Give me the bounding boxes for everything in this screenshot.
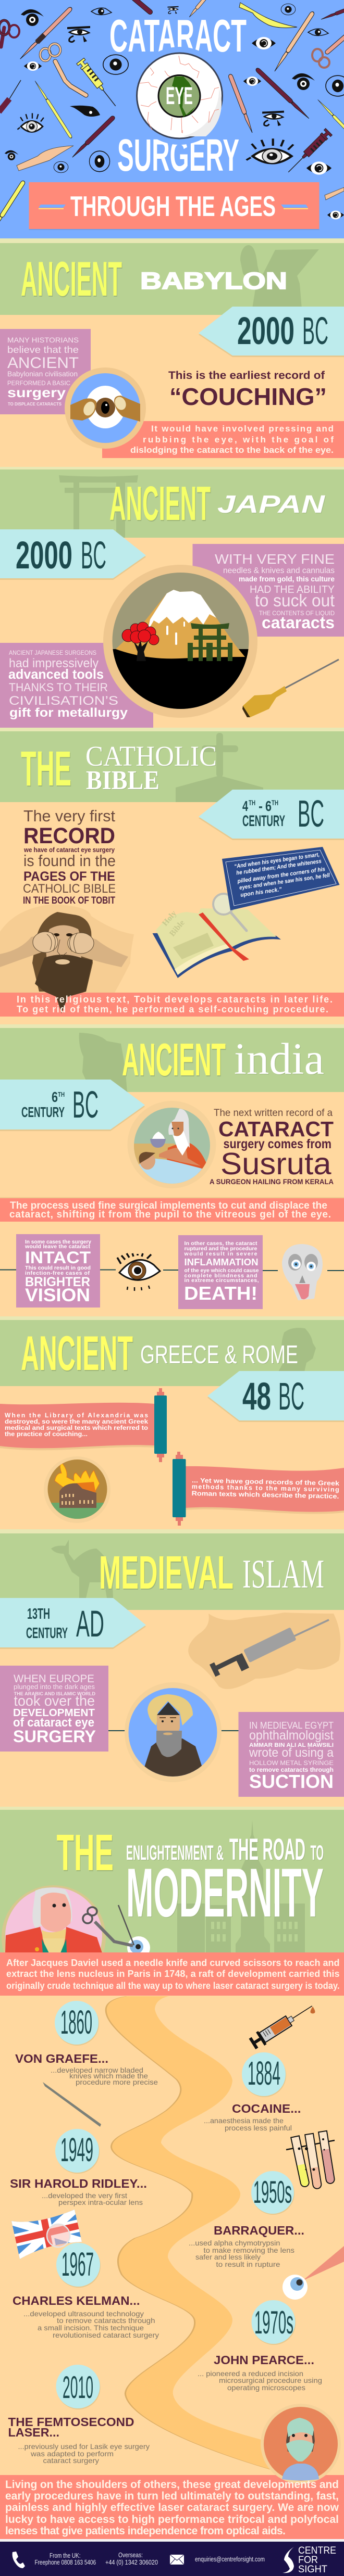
heading: bible: BIBLE	[86, 766, 159, 795]
text: charles kelman: to remove cataracts through	[57, 2316, 155, 2325]
text box: death: complete blindness and	[185, 1273, 257, 1279]
text box: intact	[16, 1234, 100, 1308]
text box: intact: would leave the cataract	[24, 1243, 91, 1250]
text: charles kelman: revolutionised cataract surgery	[53, 2331, 159, 2339]
date arrow: 13th century AD: CENTURY	[26, 1625, 68, 1642]
text: harold ridley: perspex intra-ocular lens	[58, 2198, 143, 2206]
icon: large eyeball	[130, 47, 228, 145]
panel: ancient japan	[0, 467, 344, 728]
callout: bible quote: upon his neck.”	[240, 886, 282, 898]
date arrow: 6th century BC: CENTURY	[21, 1104, 65, 1120]
text: cocaine: process less painful	[225, 2124, 292, 2132]
text box: europe dark ages: THE ARABIC AND ISLAMIC WORLD	[14, 1691, 96, 1696]
text box: europe dark ages: WHEN EUROPE	[14, 1673, 94, 1685]
text box: japanese surgeons: had impressively	[9, 656, 99, 670]
text: susruta	[210, 1108, 334, 1186]
icon: skull	[282, 1244, 323, 1300]
connector lines	[108, 1730, 239, 1731]
text: susruta: CATARACT	[218, 1117, 334, 1141]
panel: timeline	[5, 1996, 344, 2471]
text box: japanese surgeons: CIVILISATION’S	[9, 694, 118, 708]
text: barraquer	[189, 2224, 304, 2268]
text: email: enquiries@centreforsight.com	[195, 2555, 265, 2563]
date arrow: 48 BC: BC	[278, 1375, 304, 1418]
text: harold ridley: SIR HAROLD RIDLEY...	[10, 2177, 147, 2190]
text band: daviel: After Jacques Daviel used a needle knife and curved scissors to reach and	[6, 1958, 340, 1968]
text: susruta: The next written record of a	[214, 1108, 333, 1119]
icon: brown eye	[117, 1253, 160, 1291]
year bubble: 1967	[56, 2243, 101, 2288]
panel: medieval islam	[0, 1529, 344, 1797]
text box: medieval egypt	[239, 1712, 344, 1797]
year bubble: 2010	[56, 2365, 100, 2409]
heading: medieval: MEDIEVAL	[99, 1547, 234, 1599]
text box: historians: PERFORMED A BASIC	[7, 379, 70, 387]
text: charles kelman	[13, 2294, 159, 2339]
text: von graefe: knives which made the	[69, 2072, 148, 2080]
text band: conclusion	[0, 2475, 344, 2542]
ghost: church	[176, 733, 263, 802]
text: barraquer: ...used alpha chymotrypsin	[189, 2239, 280, 2247]
text: very first record: IN THE BOOK OF TOBIT	[23, 895, 115, 906]
text: susruta: Susruta	[220, 1147, 331, 1181]
callout: bible quote: eyes: and when he saw his son, he fell	[239, 872, 330, 891]
heading: the: THE	[56, 1824, 114, 1881]
text: conclusion: painless and highly effective laser cataract surgery. We are now	[5, 2502, 339, 2514]
text box: very fine needles: made from gold, this culture	[239, 575, 335, 583]
text: barraquer: BARRAQUER...	[214, 2224, 304, 2237]
date arrow: 2000 BC	[199, 307, 344, 357]
illustration: susruta portrait	[127, 1101, 216, 1188]
heading: india: india	[234, 1034, 324, 1084]
year bubble: 1949: 1949	[60, 2131, 93, 2168]
text: barraquer: to make removing the lens	[203, 2246, 294, 2254]
callout: bible quote: “And when his eyes began to smart,	[234, 852, 320, 870]
text box: historians	[0, 329, 91, 414]
panel: ancient india	[0, 1024, 344, 1309]
date arrow: 4th to 6th century BC: TH	[272, 798, 278, 807]
text: charles kelman: a small incision. This technique	[38, 2324, 144, 2332]
date arrow: 4th to 6th century BC: 6	[265, 798, 272, 814]
text: john pearce: operating microscopes	[227, 2383, 305, 2392]
ghost: ganesha	[79, 1033, 127, 1092]
text: very first record	[23, 807, 116, 906]
text: von graefe	[15, 2052, 158, 2086]
text: uk phone: Freephone 0808 163 5406	[34, 2558, 96, 2566]
icon: eye with laser	[282, 2246, 344, 2300]
text box: europe dark ages	[0, 1666, 108, 1752]
text box: intact: infection-free cases of	[25, 1270, 90, 1276]
year bubble: 1860: 1860	[60, 2003, 92, 2041]
text box: intact: In some cases the surgery	[25, 1239, 91, 1245]
panel: ancient babylon: ANCIENT	[21, 251, 122, 306]
scroll: library of alexandria: medical and surgical texts which referred to	[5, 1424, 148, 1431]
heading: the: THE	[21, 741, 71, 796]
panel: timeline: 1950s	[253, 2175, 292, 2210]
scroll: roman texts: methods thanks to the many surviving	[192, 1483, 339, 1493]
icons: scattered eyes	[5, 4, 344, 219]
panel: modernity: TO	[311, 1842, 324, 1864]
text box: very fine needles: WITH VERY FINE	[215, 551, 335, 567]
text band: daviel: extract the lens nucleus in Paris in 1748, a raft of development carried this	[6, 1969, 340, 1979]
ghost: winged horse	[240, 245, 319, 315]
year bubble: 1860	[55, 2001, 99, 2046]
date arrow: 2000 BC: BC	[81, 534, 106, 577]
ghost: roman head	[278, 1328, 316, 1372]
illustration: holy bible: Bible	[168, 918, 187, 938]
logo: centre for sight: CENTRE	[298, 2545, 336, 2556]
text: john pearce: JOHN PEARCE...	[214, 2353, 314, 2367]
date arrow: 13th century AD: AD	[76, 1604, 104, 1645]
text: couching explanation: dislodging the cataract to the back of the eye.	[130, 445, 334, 455]
date arrow: 48 BC	[207, 1371, 344, 1422]
text box: death: DEATH!	[184, 1283, 257, 1304]
text: tobit develops cataracts: In this religious text, Tobit develops cataracts in later life.	[17, 994, 333, 1005]
text box: very fine needles	[193, 544, 344, 637]
text box: medieval egypt: SUCTION	[249, 1771, 334, 1792]
ghost: torii gate	[59, 475, 138, 538]
scroll: library of alexandria: destroyed, so were the many ancient Greek	[5, 1418, 148, 1425]
text: femtosecond laser: ...previously used for Lasik eye surgery	[18, 2442, 150, 2451]
date arrow: 2000 BC: 2000	[16, 534, 72, 577]
text: very first record: we have of cataract eye surgery	[23, 846, 115, 854]
panel: header	[0, 0, 344, 238]
year bubble: 1884: 1884	[248, 2054, 280, 2092]
text: barraquer: to result in rupture	[216, 2260, 280, 2268]
text: barraquer: safer and less likely	[195, 2253, 261, 2261]
text: cocaine: COCAINE...	[232, 2102, 301, 2115]
date arrow: 2000 BC	[0, 529, 146, 580]
text box: medieval egypt: AMMAR BIN ALI AL MAWSILI	[249, 1742, 334, 1748]
heading: ancient: ANCIENT	[122, 1034, 226, 1085]
body text box: pressing	[102, 421, 344, 458]
text box: death: ruptured and the procedure	[185, 1246, 257, 1252]
text: couching explanation: rubbing the eye, with the goal of	[143, 435, 334, 445]
text: femtosecond laser: was adapted to perform	[30, 2450, 114, 2458]
text: von graefe: procedure more precise	[76, 2078, 158, 2086]
icons: scissors and knives	[0, 3, 344, 200]
text box: japanese surgeons: advanced tools	[8, 666, 104, 682]
text: harold ridley	[10, 2177, 147, 2206]
text box: death: in extreme circumstances,	[185, 1277, 259, 1284]
text box: intact: This could result in good	[25, 1265, 91, 1271]
text: overseas phone	[105, 2551, 158, 2566]
text box: death: of the eye which could cause	[185, 1267, 259, 1274]
text box: historians: believe that the	[7, 345, 79, 355]
icons: syringes	[77, 58, 332, 175]
icon: orange syringe	[248, 1999, 316, 2051]
text band: process: The process used fine surgical implements to cut and displace the	[10, 1200, 327, 1211]
text box: intact: INTACT	[25, 1248, 91, 1267]
year bubble: 1950s	[251, 2171, 294, 2215]
callout: bible quote: pilled away from the corners of his	[237, 866, 326, 885]
illustration: metal syringe	[188, 1613, 340, 1689]
scroll: roman texts: Roman texts which describe the practice.	[191, 1490, 339, 1500]
text box: europe dark ages: of cataract eye	[13, 1716, 94, 1730]
text: john pearce: microsurgical procedure using	[219, 2376, 322, 2384]
footer	[0, 2542, 344, 2576]
text: charles kelman: CHARLES KELMAN...	[13, 2294, 140, 2307]
text: conclusion: Living on the shoulders of others, these great developments and	[5, 2479, 339, 2491]
heading: catholic: CATHOLIC	[85, 740, 217, 772]
timeline ribbon	[105, 1996, 276, 2471]
text band: process: cataract, shifting it from the pupil to the vitreous gel of the eye.	[9, 1209, 331, 1220]
text box: europe dark ages: SURGERY	[13, 1727, 96, 1746]
text: cocaine: ...anaesthesia made the	[204, 2116, 284, 2125]
text box: very fine needles: needles & knives and cannulas	[223, 566, 335, 575]
text: charles kelman: ...developed ultrasound technology	[23, 2309, 144, 2318]
date arrow: 4th to 6th century BC: 4	[242, 798, 248, 814]
scroll: roman texts	[173, 1452, 344, 1526]
title: surgery: SURGERY	[117, 130, 239, 181]
text: susruta: A SURGEON HAILING FROM KERALA	[210, 1178, 334, 1186]
text box: very fine needles: THE CONTENTS OF LIQUID	[259, 610, 335, 617]
text box: historians: ANCIENT	[7, 354, 79, 372]
text: femtosecond laser: LASER...	[8, 2426, 59, 2439]
text: harold ridley: ...developed the very first	[42, 2191, 127, 2200]
panel: ancient japan: ANCIENT	[109, 476, 211, 530]
text box: medieval egypt: wrote of using a	[249, 1746, 334, 1760]
text: very first record: is found in the	[23, 852, 116, 870]
year bubble: 1967: 1967	[62, 2245, 94, 2283]
panel: greece and rome	[0, 1316, 344, 1526]
text box: very fine needles: HAD THE ABILITY	[250, 584, 335, 595]
text box: japanese surgeons	[0, 643, 153, 728]
icon: narrow knife	[43, 2082, 101, 2127]
text band: process	[0, 1197, 344, 1222]
year bubble: 1884	[242, 2052, 286, 2097]
date arrow: 4th to 6th century BC: -	[259, 798, 263, 814]
icons: scalpels	[0, 0, 344, 235]
illustration: mount fuji	[103, 565, 257, 718]
heading: japan: JAPAN	[217, 491, 326, 518]
text: femtosecond laser: THE FEMTOSECOND	[8, 2415, 134, 2429]
banner: through the ages	[29, 182, 319, 230]
text: conclusion: lucky to have access to high performance trifocal and polyfocal	[5, 2514, 339, 2526]
year bubble: 1970s	[251, 2300, 296, 2345]
icon: drop	[311, 2007, 315, 2013]
illustration: holy bible: Holy	[161, 909, 178, 928]
date arrow: 2000 BC: 2000	[237, 309, 294, 352]
text box: medieval egypt: HOLLOW METAL SYRINGE	[249, 1759, 334, 1767]
text: uk phone: From the UK:	[50, 2552, 80, 2559]
illustration: holy bible	[152, 894, 281, 978]
text box: medieval egypt: IN MEDIEVAL EGYPT	[249, 1720, 334, 1731]
text box: very fine needles: to suck out	[255, 591, 335, 610]
text: tobit develops cataracts	[17, 994, 333, 1014]
text: very first record: CATHOLIC BIBLE	[23, 882, 116, 896]
icon: test tubes	[286, 2131, 335, 2189]
text box: europe dark ages: took over the	[14, 1693, 95, 1709]
illustration: burning colosseum	[44, 1456, 110, 1523]
scroll: library of alexandria: the practice of couching...	[5, 1430, 88, 1438]
scroll: library of alexandria	[0, 1388, 167, 1462]
illustration: tobit rubbing eyes	[0, 904, 134, 1013]
date arrow: 6th century BC: TH	[58, 1090, 65, 1098]
callout: bible quote: he rubbed them; And the whiteness	[236, 858, 322, 877]
text: couching: “COUCHING”	[169, 383, 327, 410]
text: von graefe: VON GRAEFE...	[15, 2052, 108, 2065]
date arrow: 4th to 6th century BC	[199, 790, 344, 840]
text: john pearce	[198, 2353, 322, 2392]
text band: tobit	[0, 993, 344, 1017]
text: overseas phone: +44 (0) 1342 306020	[105, 2558, 158, 2566]
date arrow: 48 BC: 48	[242, 1375, 271, 1418]
text: conclusion: lenses that give patients independence from optical aids.	[5, 2525, 286, 2537]
date arrow: 6th century BC	[0, 1080, 145, 1131]
panel: modernity: ENLIGHTENMENT &	[126, 1842, 224, 1864]
text box: intact: VISION	[25, 1285, 90, 1305]
icon: phone	[13, 2552, 25, 2568]
heading: babylon: BABYLON	[140, 268, 287, 294]
text: very first record: The very first	[23, 807, 115, 825]
panel: modernity	[0, 1807, 344, 1996]
text: conclusion: early procedures have in turn led ultimately to outstanding, fast,	[5, 2490, 339, 2502]
year bubble: 1949	[55, 2129, 100, 2174]
text: cocaine	[204, 2102, 301, 2132]
illustration: daviel portrait	[2, 1885, 150, 1952]
heading: ancient: ANCIENT	[21, 1326, 133, 1380]
illustration: ammar portrait	[125, 1682, 222, 1782]
text: femtosecond laser: cataract surgery	[43, 2456, 99, 2465]
text box: japanese surgeons: THANKS TO THEIR	[9, 681, 108, 694]
date arrow: 6th century BC: 6	[52, 1089, 58, 1105]
scroll: roman texts: ... Yet we have good records of the Greek	[192, 1477, 339, 1487]
ghost: camel	[51, 1540, 113, 1598]
text: uk phone	[34, 2552, 96, 2566]
illustration: surgeon portrait	[261, 2404, 341, 2484]
text: overseas phone: Overseas:	[118, 2551, 143, 2559]
text: tobit develops cataracts: To get rid of them, he performed a self-couching procedure.	[17, 1004, 328, 1014]
text box: historians: surgery	[7, 385, 66, 400]
text: von graefe: ...developed narrow bladed	[51, 2066, 143, 2074]
text box: japanese surgeons: gift for metallurgy	[9, 706, 128, 720]
date arrow: 13th century AD	[0, 1598, 146, 1649]
callout: bible quote	[222, 847, 340, 910]
text box: historians: MANY HISTORIANS	[7, 336, 79, 344]
text: very first record: PAGES OF THE	[23, 869, 115, 884]
date arrow: 13th century AD: 13TH	[27, 1606, 50, 1622]
text box: historians: Babylonian civilisation	[7, 370, 78, 378]
icon: golden needle tool	[242, 659, 339, 717]
illustration: couching eye	[65, 367, 146, 449]
icon: scissors on eye	[83, 1905, 150, 1959]
panel: catholic bible	[0, 728, 344, 1017]
text: very first record: RECORD	[23, 823, 115, 848]
text box: very fine needles: cataracts	[262, 613, 335, 632]
text: conclusion	[5, 2479, 339, 2537]
text box: historians: TO DISPLACE CATARACTS	[8, 402, 62, 407]
text box: europe dark ages: plunged into the dark ages	[14, 1683, 95, 1691]
panel: ancient babylon	[0, 238, 344, 458]
date arrow: 4th to 6th century BC: CENTURY	[242, 813, 285, 830]
date arrow: 6th century BC: BC	[72, 1084, 99, 1126]
text box: death: would result in severe	[183, 1251, 257, 1257]
icon: envelope	[170, 2555, 184, 2565]
text band: daviel	[0, 1952, 344, 1996]
text box: death	[178, 1235, 263, 1309]
text box: medieval egypt: ophthalmologist	[249, 1728, 334, 1743]
connector lines	[0, 1269, 344, 1271]
text box: japanese surgeons: ANCIENT JAPANESE SURGEONS	[9, 649, 96, 656]
text: femtosecond laser	[8, 2415, 150, 2465]
logo: centre for sight: SIGHT	[298, 2564, 327, 2575]
text: couching explanation	[130, 424, 334, 455]
date arrow: 4th to 6th century BC: TH	[249, 798, 255, 807]
text: couching explanation: It would have involved pressing and	[151, 424, 334, 434]
text box: europe dark ages: DEVELOPMENT	[13, 1707, 95, 1719]
logo: centre for sight	[282, 2545, 336, 2575]
text box: death: In other cases, the cataract	[185, 1240, 257, 1247]
eye label: EYE	[166, 82, 193, 109]
text: john pearce: ... pioneered a reduced incision	[198, 2369, 303, 2378]
ghost: skyline	[177, 1820, 305, 1952]
panel: timeline: 1970s	[254, 2305, 293, 2341]
year bubble: 2010: 2010	[63, 2370, 93, 2405]
text box: intact: BRIGHTER	[25, 1275, 90, 1289]
logo: centre for sight: FOR	[298, 2555, 318, 2566]
text box: medieval egypt: to remove cataracts through	[249, 1766, 334, 1773]
scroll: library of alexandria: When the Library of Alexandria was	[5, 1412, 148, 1419]
text box: death: INFLAMMATION	[185, 1257, 259, 1267]
icon: union flag	[11, 2210, 82, 2259]
text: earliest record: This is the earliest record of	[168, 370, 325, 382]
